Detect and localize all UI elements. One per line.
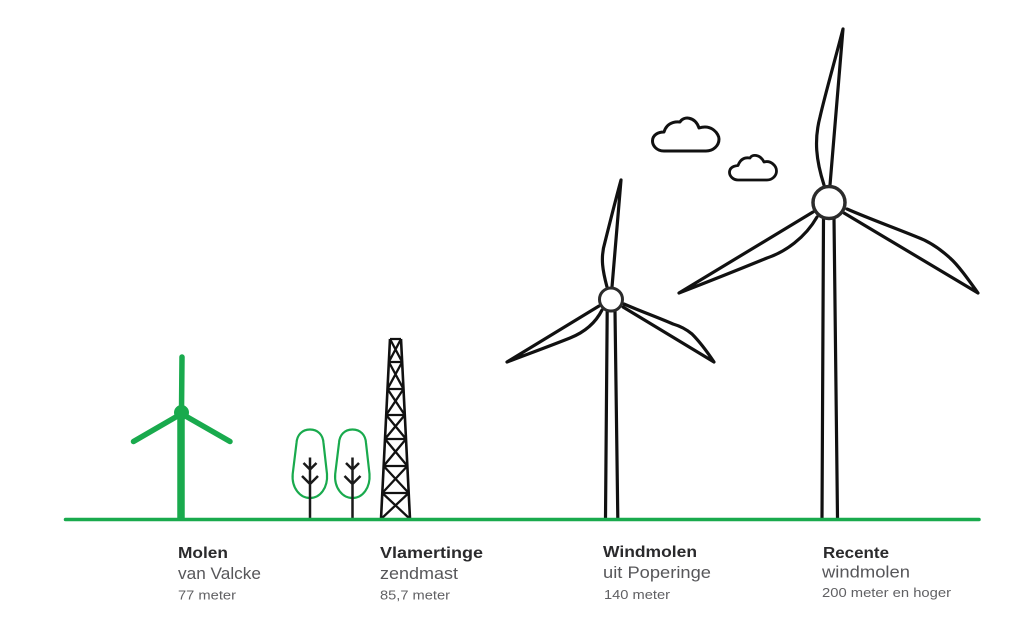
- label: Vlamertinge zendmast: 85,7 meter: [380, 588, 451, 602]
- icon: large cloud: [652, 118, 719, 151]
- label: Recente windmolen: windmolen: [821, 564, 910, 582]
- label: Recente windmolen: [821, 545, 952, 600]
- turbine hub: [813, 186, 845, 218]
- label: Molen van Valcke: 77 meter: [178, 588, 237, 602]
- icon: small cloud: [730, 155, 776, 180]
- icon: tree 1: [293, 430, 327, 518]
- label: Vlamertinge zendmast: zendmast: [380, 565, 458, 583]
- label: Vlamertinge zendmast: [380, 545, 483, 602]
- turbine blades: [679, 29, 978, 293]
- icon: tree 2: [335, 430, 370, 518]
- label: Molen van Valcke: [178, 545, 261, 602]
- icon: Vlamertinge transmission mast: [381, 339, 410, 519]
- label: Windmolen uit Poperinge: Windmolen: [603, 544, 697, 561]
- turbine tower: [606, 311, 618, 518]
- icon: recent large wind turbine: [679, 29, 978, 518]
- icon: Poperinge wind turbine: [507, 180, 714, 518]
- label: Recente windmolen: Recente: [823, 545, 889, 562]
- label: Recente windmolen: 200 meter en hoger: [822, 585, 952, 600]
- label: Vlamertinge zendmast: Vlamertinge: [380, 545, 483, 562]
- label: Windmolen uit Poperinge: [603, 544, 711, 602]
- label: Windmolen uit Poperinge: uit Poperinge: [603, 564, 711, 582]
- turbine tower: [822, 218, 838, 518]
- turbine hub: [600, 288, 622, 311]
- turbine blades: [507, 180, 714, 362]
- label: Molen van Valcke: van Valcke: [178, 565, 261, 583]
- label: Molen van Valcke: Molen: [178, 545, 228, 562]
- ground line: [66, 518, 979, 521]
- label: Windmolen uit Poperinge: 140 meter: [604, 587, 671, 602]
- icon: green windmill Molen van Valcke: [134, 357, 230, 519]
